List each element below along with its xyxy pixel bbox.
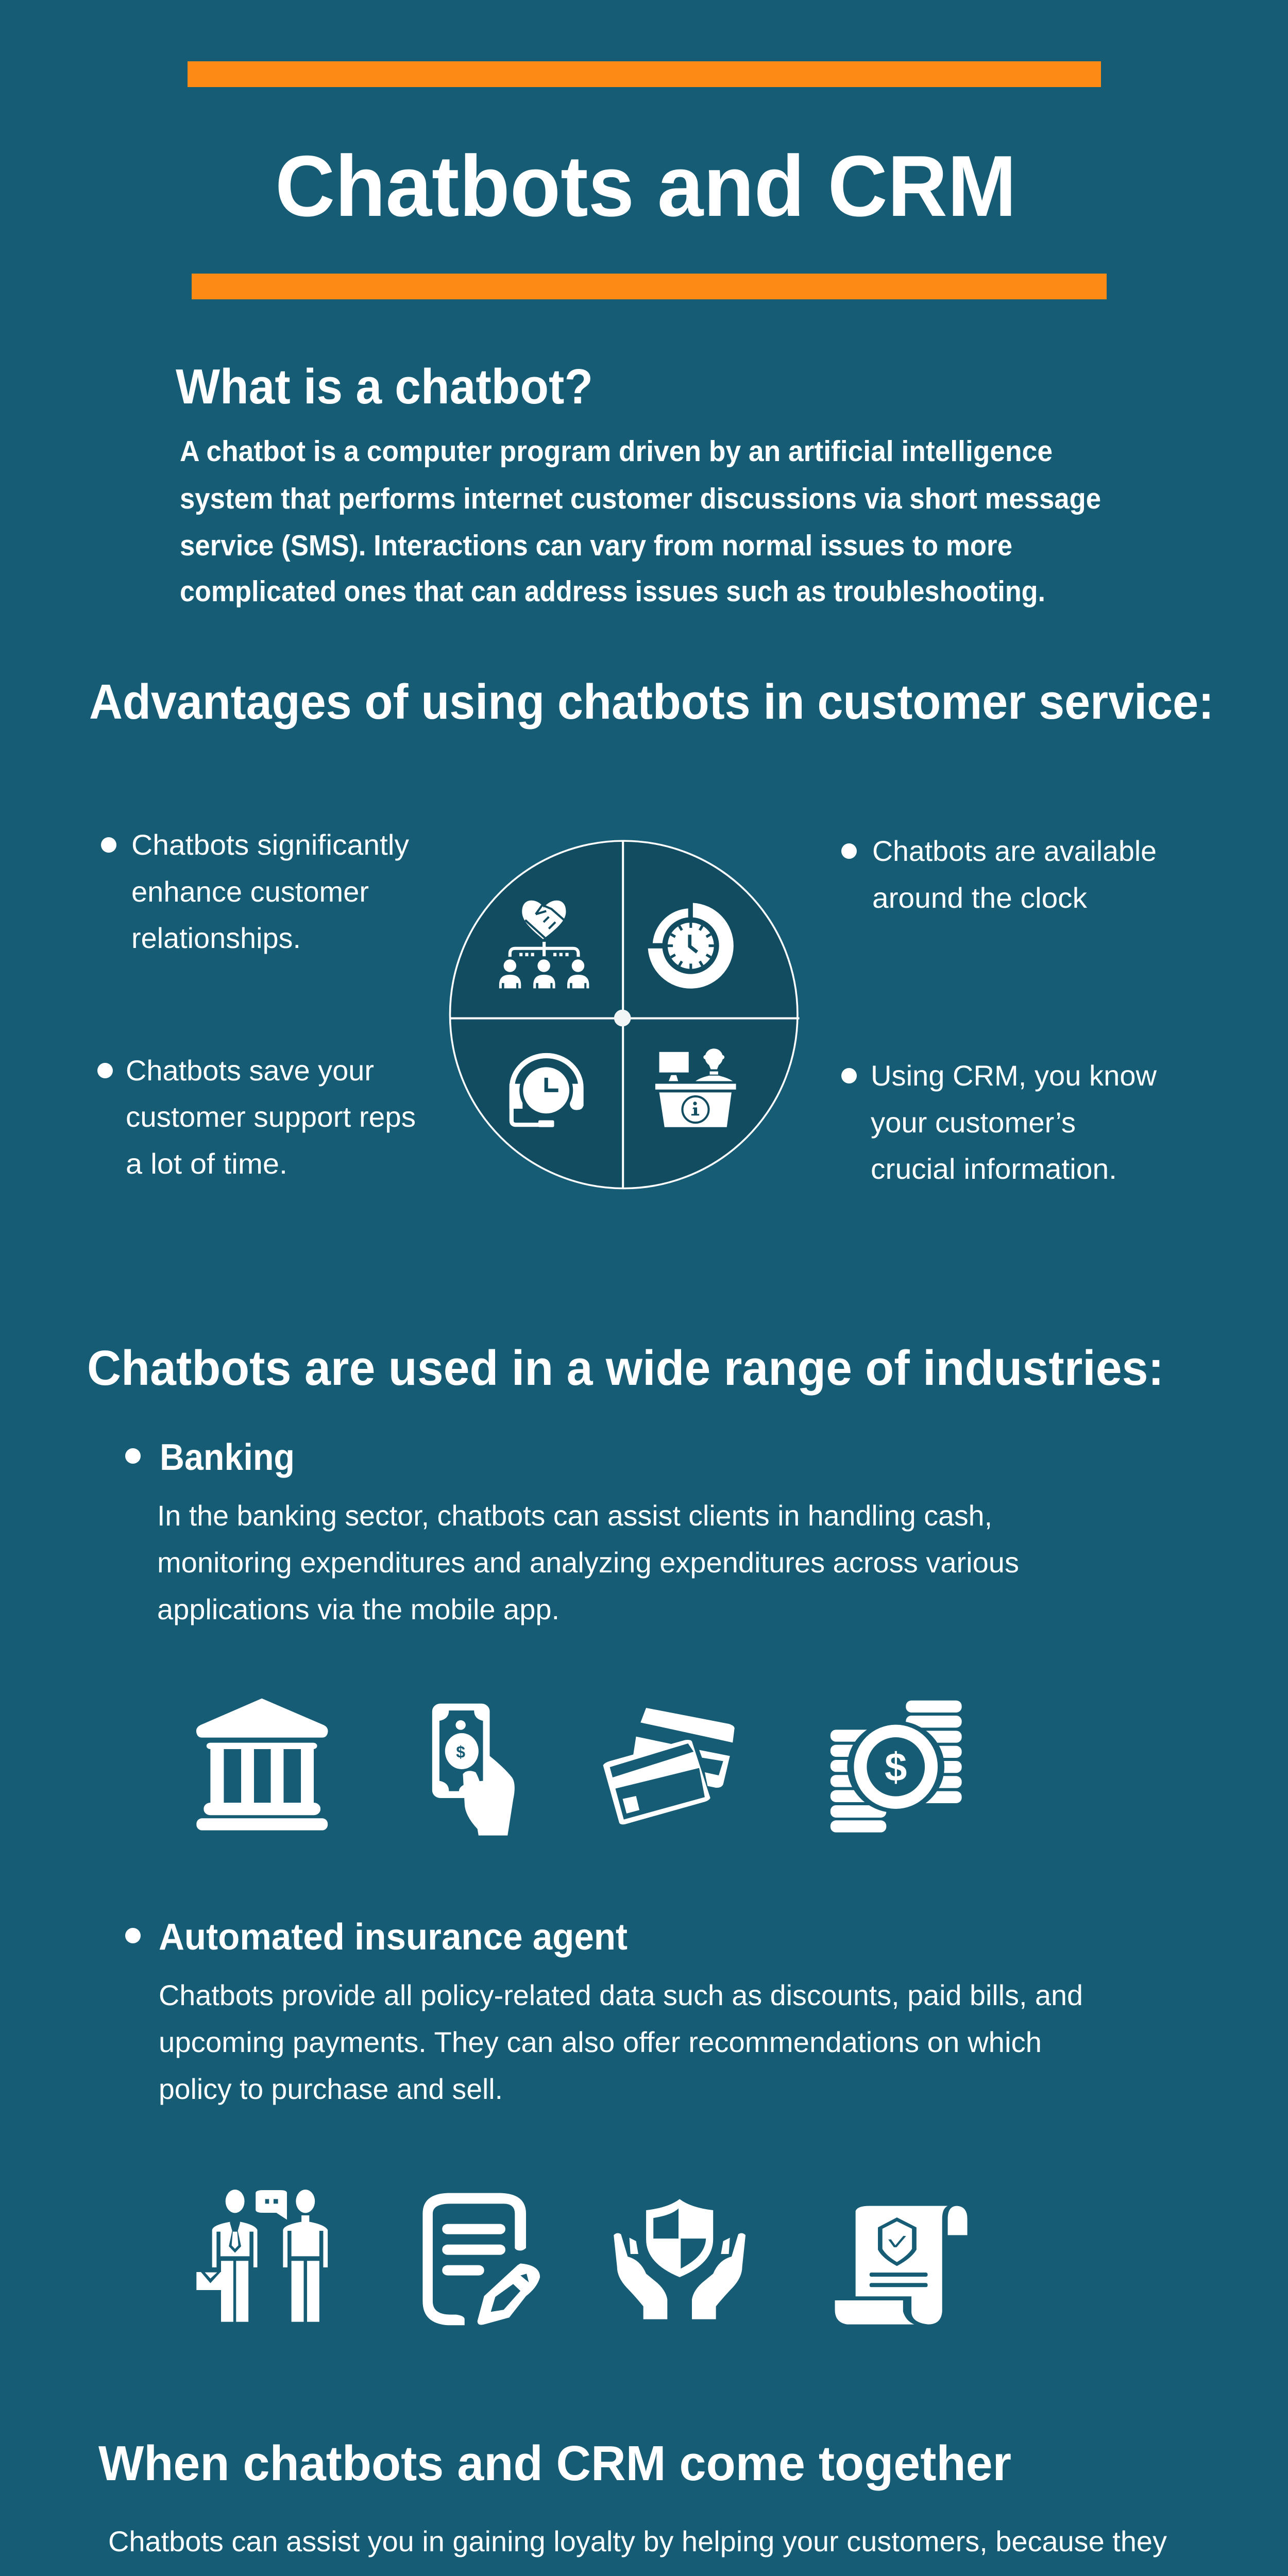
text block: banking description: monitoring expenditures and analyzing expenditures across various <box>157 1546 1019 1579</box>
text block: insurance description: Chatbots provide all policy-related data such as discounts, paid bills, and <box>159 1979 1083 2011</box>
quadrant circle <box>450 841 800 1189</box>
text block: chatbot definition: system that performs internet customer discussions via short message <box>180 482 1101 515</box>
bullet: customer relationships: enhance customer <box>131 875 369 908</box>
bullet: crucial information: crucial information. <box>871 1153 1117 1185</box>
text block: insurance description <box>159 1979 1083 2105</box>
icon: document and pencil <box>422 2193 540 2325</box>
text block: loyalty description <box>108 2525 1167 2576</box>
bullet: crucial information <box>841 1059 1157 1185</box>
top orange bar <box>188 61 1101 87</box>
icon row: insurance <box>196 2190 968 2325</box>
icon: hand holding money <box>432 1704 515 1836</box>
icon: shield in hands <box>614 2199 745 2319</box>
bottom orange bar <box>192 274 1107 299</box>
heading: what is a chatbot: What is a chatbot? <box>176 359 593 414</box>
bullet: customer relationships <box>101 828 409 954</box>
icon: bank building <box>196 1699 328 1831</box>
bullet: around the clock: around the clock <box>872 882 1088 914</box>
bullet: customer relationships: Chatbots significantly <box>131 828 409 861</box>
text block: loyalty description: Chatbots can assist you in gaining loyalty by helping your customers, because they <box>108 2525 1167 2557</box>
title: Chatbots and CRM <box>275 138 1016 234</box>
icon: headset clock <box>510 1056 583 1127</box>
bullet: save time: a lot of time. <box>126 1147 287 1180</box>
icon: coin stacks <box>831 1701 962 1833</box>
text block: insurance description: upcoming payments. They can also offer recommendations on which <box>159 2026 1042 2058</box>
bullet: save time: customer support reps <box>126 1100 416 1133</box>
icon: clock with donut <box>648 903 734 989</box>
bullet: save time: Chatbots save your <box>126 1054 374 1087</box>
text block: chatbot definition <box>180 435 1101 608</box>
icon: coin stacks: $ <box>885 1744 907 1790</box>
bullet: crucial information: Using CRM, you know <box>871 1059 1157 1092</box>
subheading: automated insurance agent: Automated insurance agent <box>159 1917 628 1958</box>
text block: chatbot definition: complicated ones that can address issues such as troubleshooting. <box>180 575 1045 608</box>
heading: advantages: Advantages of using chatbots in customer service: <box>89 674 1214 730</box>
text block: banking description <box>157 1499 1019 1625</box>
text block: chatbot definition: A chatbot is a computer program driven by an artificial intelligence <box>180 435 1053 468</box>
heading: when chatbots and CRM come together: When chatbots and CRM come together <box>98 2436 1011 2491</box>
text block: chatbot definition: service (SMS). Interactions can vary from normal issues to more <box>180 529 1012 562</box>
text block: banking description: applications via the mobile app. <box>157 1593 560 1625</box>
bullet: around the clock <box>841 835 1157 914</box>
bullet: save time <box>97 1054 416 1180</box>
bullet: around the clock: Chatbots are available <box>872 835 1157 867</box>
text block: insurance description: policy to purchase and sell. <box>159 2073 503 2105</box>
icon: handshake heart and team <box>499 901 589 988</box>
bullet: customer relationships: relationships. <box>131 922 301 954</box>
icon: hand holding money: $ <box>456 1743 465 1761</box>
heading: industries: Chatbots are used in a wide range of industries: <box>87 1341 1164 1396</box>
bullet: crucial information: your customer’s <box>871 1106 1076 1139</box>
icon: two businessmen talking <box>196 2190 328 2322</box>
icon row: banking <box>196 1699 962 1836</box>
icon: reception desk <box>655 1048 736 1127</box>
subheading: banking: Banking <box>160 1437 295 1478</box>
icon: credit cards <box>603 1708 735 1824</box>
text block: banking description: In the banking sector, chatbots can assist clients in handling cash, <box>157 1499 992 1532</box>
icon: policy scroll <box>835 2206 968 2325</box>
